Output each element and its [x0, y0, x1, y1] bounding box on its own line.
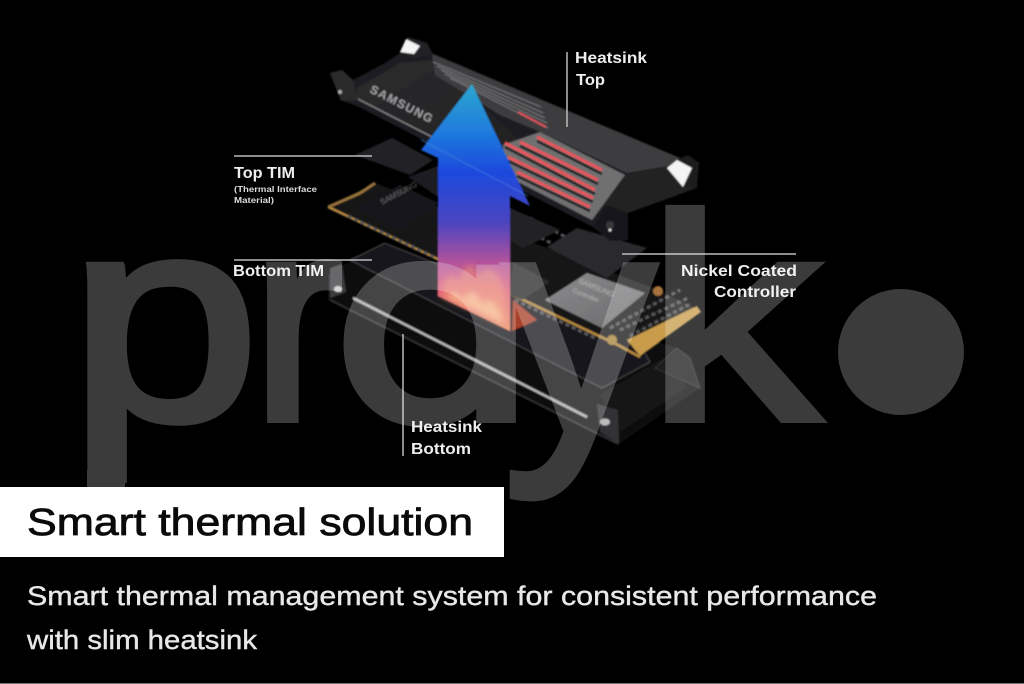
label: heatsink bottom — [403, 334, 482, 458]
grey fin plate — [503, 132, 625, 220]
dark top face — [357, 60, 600, 218]
label: heatsink top: Heatsink — [575, 50, 647, 67]
title banner: Smart thermal solution — [27, 502, 473, 544]
label: nickel coated controller: Controller — [714, 284, 796, 301]
illustration: exploded SSD with heatsink — [328, 37, 701, 444]
label: top TIM: Top TIM — [234, 165, 295, 182]
samsung logo: SAMSUNG — [368, 82, 436, 126]
right corner bracket — [593, 205, 628, 241]
upper bevel band — [432, 54, 680, 173]
SSD circuit board — [328, 180, 701, 357]
watermark: p — [69, 158, 259, 482]
label: top TIM — [234, 156, 372, 205]
description text: with slim heatsink — [26, 625, 258, 655]
controller chip — [545, 273, 645, 328]
heatsink top — [330, 37, 699, 241]
label: bottom TIM — [233, 260, 372, 280]
label: heatsink top: Top — [576, 72, 605, 89]
controller chip: Controller — [571, 287, 601, 305]
bottom TIM — [350, 243, 650, 388]
watermark: y — [504, 150, 655, 501]
label: nickel coated controller: Nickel Coated — [681, 263, 797, 280]
heatsink bottom — [328, 250, 700, 444]
description text — [26, 581, 877, 655]
fin shadows — [505, 141, 602, 211]
left corner bracket — [330, 70, 358, 101]
glow — [518, 112, 546, 127]
watermark: k — [647, 158, 823, 481]
top TIM — [355, 138, 560, 248]
description text: Smart thermal management system for consistent performance — [27, 581, 877, 611]
label: nickel coated controller — [622, 254, 797, 301]
heat arrow — [421, 84, 537, 331]
title banner — [0, 487, 504, 557]
label: heatsink top — [567, 50, 647, 127]
watermark: ɑ — [330, 164, 541, 484]
controller chip: SAMSUNG — [577, 277, 616, 299]
label: heatsink bottom: Bottom — [411, 441, 471, 458]
label: top TIM: (Thermal Interface — [234, 185, 318, 194]
right wedge — [603, 167, 697, 213]
flames — [442, 265, 506, 324]
label: heatsink bottom: Heatsink — [411, 419, 482, 436]
label: bottom TIM: Bottom TIM — [233, 263, 324, 280]
right clip — [677, 155, 699, 188]
board components — [348, 216, 690, 338]
top clip — [400, 37, 432, 58]
nickel coated plate — [547, 228, 647, 278]
watermark: r — [252, 156, 343, 481]
silhouette — [330, 37, 698, 240]
red fins — [505, 137, 602, 207]
silver stripes — [433, 62, 548, 128]
SSD circuit board: SAMSUNG — [379, 180, 419, 207]
watermark — [69, 150, 964, 501]
label: top TIM: Material) — [234, 196, 274, 205]
